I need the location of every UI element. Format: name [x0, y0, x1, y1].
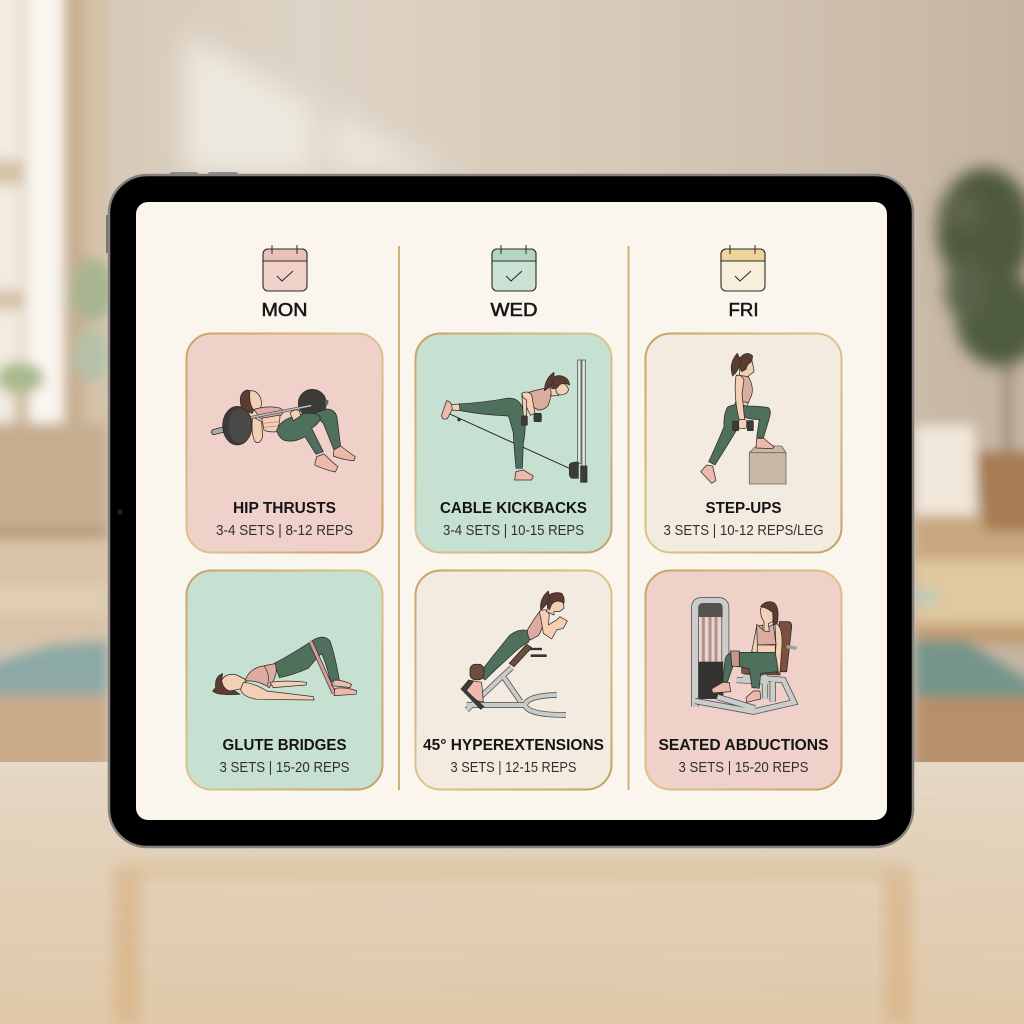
panel: 45 degree Hyperextensions: 3 SETS | 12-15 REPS	[450, 759, 576, 776]
day header: Monday: MON	[262, 299, 308, 320]
day header: Friday	[721, 245, 765, 320]
panel: Glute Bridges: GLUTE BRIDGES	[222, 737, 347, 754]
panel: Cable Kickbacks	[416, 334, 612, 552]
illustration: hip thrust	[214, 389, 355, 472]
wooden table	[0, 762, 1024, 1024]
panel: 45 degree Hyperextensions	[416, 570, 612, 790]
illustration: seated abduction machine	[695, 601, 797, 712]
illustration: glute bridge	[213, 637, 357, 700]
day header: Wednesday	[490, 245, 538, 320]
panel: Glute Bridges	[186, 570, 382, 790]
blurred room background	[0, 0, 1024, 770]
panel: Step-Ups	[646, 334, 842, 552]
panel: Step-Ups: 3 SETS | 10-12 REPS/LEG	[664, 522, 824, 539]
panel: 45 degree Hyperextensions: 45° HYPEREXTENSIONS	[423, 737, 604, 754]
icon: calendar Friday	[721, 245, 765, 291]
icon: calendar Monday	[263, 245, 307, 291]
illustration: cable kickback	[442, 360, 587, 482]
panel: Hip Thrusts: HIP THRUSTS	[233, 500, 336, 517]
panel: Cable Kickbacks: 3-4 SETS | 10-15 REPS	[443, 522, 584, 539]
panel: Cable Kickbacks: CABLE KICKBACKS	[440, 500, 587, 517]
icon: calendar Wednesday	[492, 245, 536, 291]
column dividers	[398, 246, 630, 790]
day header: Friday: FRI	[728, 299, 758, 320]
panel: Seated Abductions: SEATED ABDUCTIONS	[658, 737, 829, 754]
panel: Seated Abductions: 3 SETS | 15-20 REPS	[678, 759, 808, 776]
panel: Seated Abductions	[646, 570, 842, 790]
day header: Wednesday: WED	[490, 299, 538, 320]
illustration: step-up	[701, 353, 786, 484]
panel: Glute Bridges: 3 SETS | 15-20 REPS	[220, 759, 350, 776]
panel: Hip Thrusts: 3-4 SETS | 8-12 REPS	[216, 522, 353, 539]
panel: Hip Thrusts	[186, 334, 382, 552]
tablet	[106, 172, 913, 847]
illustration: hyperextension	[461, 591, 567, 715]
panel: Step-Ups: STEP-UPS	[706, 500, 782, 517]
day header: Monday	[262, 245, 308, 320]
screen	[136, 202, 887, 820]
